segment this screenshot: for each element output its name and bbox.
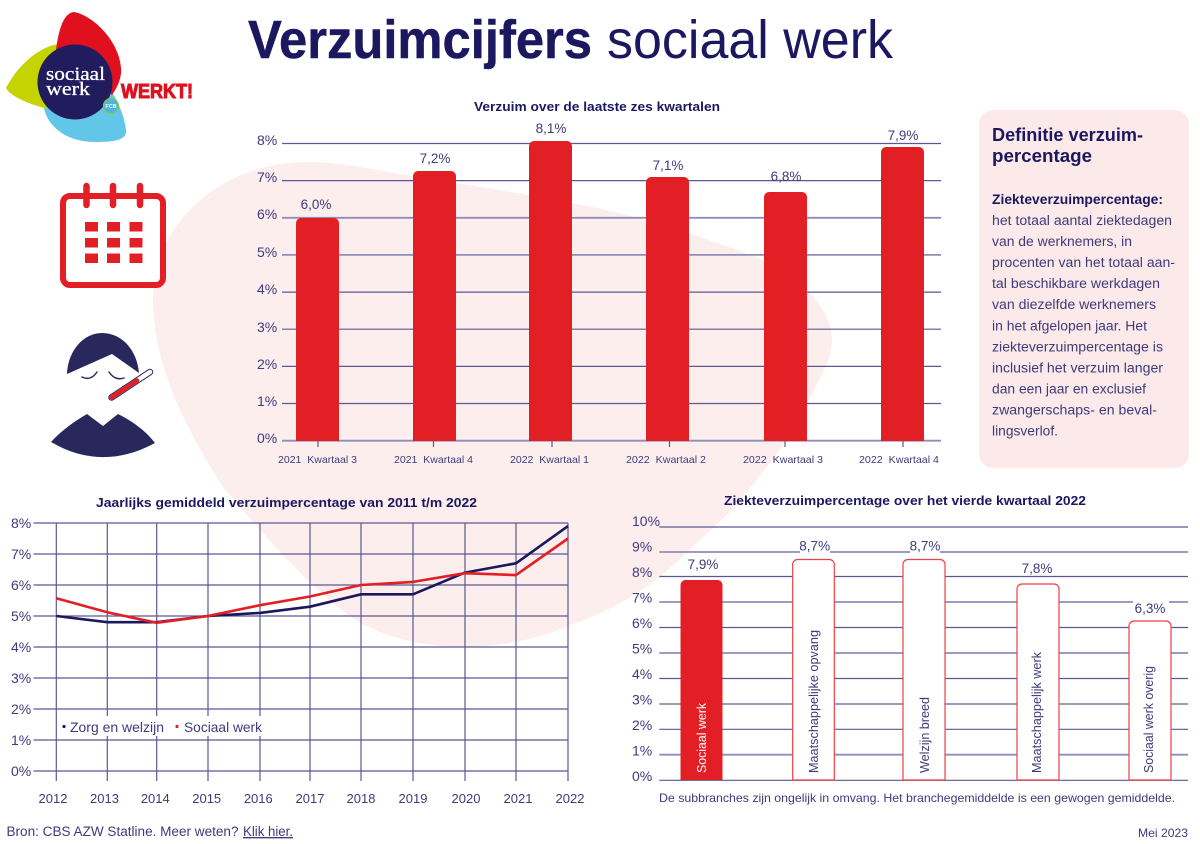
chart: verzuim over de laatste zes kwartalen: 8% xyxy=(257,132,277,148)
panel: definitie verzuimpercentage: procenten van het totaal aan- xyxy=(992,255,1175,270)
chart: verzuim over de laatste zes kwartalen: 2022 Kwartaal 2 xyxy=(626,454,706,466)
panel: definitie verzuimpercentage: Ziekteverzuimpercentage: xyxy=(992,192,1163,207)
chart: ziekteverzuimpercentage vierde kwartaal: 7,8% xyxy=(1022,561,1052,576)
chart: ziekteverzuimpercentage vierde kwartaal: 7% xyxy=(632,590,652,606)
chart: ziekteverzuimpercentage vierde kwartaal: 3% xyxy=(632,692,652,708)
chart: verzuim over de laatste zes kwartalen xyxy=(257,99,941,466)
chart note: De subbranches zijn ongelijk in omvang. Het branchegemiddelde is een gewogen gemiddelde. xyxy=(659,791,1175,805)
chart: jaarlijks gemiddeld verzuimpercentage: 2016 xyxy=(244,791,273,806)
source line: Bron: CBS AZW Statline. Meer weten? xyxy=(6,824,238,839)
panel: definitie verzuimpercentage: van diezelfde werknemers xyxy=(992,297,1156,312)
chart: verzuim over de laatste zes kwartalen: 3% xyxy=(257,319,277,335)
background blob xyxy=(153,162,832,647)
chart: jaarlijks gemiddeld verzuimpercentage: 7% xyxy=(11,546,31,562)
chart: ziekteverzuimpercentage vierde kwartaal: 6% xyxy=(632,615,652,631)
chart: verzuim over de laatste zes kwartalen: 1% xyxy=(257,393,277,409)
chart: verzuim over de laatste zes kwartalen: 2021 Kwartaal 4 xyxy=(394,454,473,466)
chart: verzuim over de laatste zes kwartalen: 2021 Kwartaal 3 xyxy=(278,454,357,466)
legend xyxy=(60,716,265,736)
icon: sick person with thermometer xyxy=(51,333,155,457)
chart: jaarlijks gemiddeld verzuimpercentage: 8% xyxy=(11,515,31,531)
chart: verzuim over de laatste zes kwartalen: 4% xyxy=(257,281,277,297)
chart: jaarlijks gemiddeld verzuimpercentage: 3% xyxy=(11,670,31,686)
chart: ziekteverzuimpercentage vierde kwartaal: 0% xyxy=(632,768,652,784)
chart: ziekteverzuimpercentage vierde kwartaal: Welzijn breed xyxy=(918,697,932,773)
bars: subbranches xyxy=(680,560,1171,780)
chart title: vierde kwartaal: Ziekteverzuimpercentage over het vierde kwartaal 2022 xyxy=(724,493,1086,508)
title xyxy=(248,10,894,70)
chart: verzuim over de laatste zes kwartalen: 2% xyxy=(257,356,277,372)
chart: ziekteverzuimpercentage vierde kwartaal: 9% xyxy=(632,538,652,554)
legend: Sociaal werk xyxy=(184,719,263,735)
date: Mei 2023 xyxy=(1138,826,1188,840)
chart: verzuim over de laatste zes kwartalen: 0% xyxy=(257,430,277,446)
chart: verzuim over de laatste zes kwartalen: 6,8% xyxy=(771,169,801,184)
chart: ziekteverzuimpercentage vierde kwartaal: 8% xyxy=(632,564,652,580)
chart: ziekteverzuimpercentage vierde kwartaal: 10% xyxy=(632,513,660,529)
panel: definitie verzuimpercentage: het totaal aantal ziektedagen xyxy=(992,213,1172,228)
chart: jaarlijks gemiddeld verzuimpercentage: 6% xyxy=(11,577,31,593)
panel: definitie verzuimpercentage: in het afgelopen jaar. Het xyxy=(992,318,1147,334)
bars: kwartalen xyxy=(296,141,924,441)
chart: ziekteverzuimpercentage vierde kwartaal: 6,3% xyxy=(1135,601,1165,616)
title: sociaal werk xyxy=(607,10,894,70)
logo: sociaal werk werkt: sociaal xyxy=(46,65,105,85)
chart: jaarlijks gemiddeld verzuimpercentage: 2015 xyxy=(192,791,221,806)
chart: ziekteverzuimpercentage vierde kwartaal: Maatschappelijk werk xyxy=(1030,651,1044,773)
chart: verzuim over de laatste zes kwartalen: 2022 Kwartaal 3 xyxy=(743,454,823,466)
line: zorg en welzijn xyxy=(56,526,568,622)
chart: jaarlijks gemiddeld verzuimpercentage: 2019 xyxy=(399,791,427,806)
panel: definitie verzuimpercentage: tal beschikbare werkdagen xyxy=(992,276,1160,291)
logo: sociaal werk werkt: WERKT! xyxy=(121,81,193,103)
chart: jaarlijks gemiddeld verzuimpercentage: 2014 xyxy=(141,791,170,806)
logo: sociaal werk werkt: FCB xyxy=(105,104,117,110)
chart: verzuim over de laatste zes kwartalen: 2022 Kwartaal 1 xyxy=(510,454,589,466)
panel: definitie verzuimpercentage: van de werknemers, in xyxy=(992,234,1132,249)
logo: sociaal werk werkt: werk xyxy=(46,80,91,100)
panel: definitie verzuimpercentage: dan een jaar en exclusief xyxy=(992,382,1146,396)
chart: jaarlijks gemiddeld verzuimpercentage: 1% xyxy=(11,732,31,748)
chart: ziekteverzuimpercentage vierde kwartaal xyxy=(632,493,1188,805)
chart title: jaarlijks: Jaarlijks gemiddeld verzuimpercentage van 2011 t/m 2022 xyxy=(96,495,477,510)
panel: definitie verzuimpercentage xyxy=(979,110,1189,468)
chart: verzuim over de laatste zes kwartalen: 8,1% xyxy=(536,121,566,136)
chart: jaarlijks gemiddeld verzuimpercentage: 2020 xyxy=(452,791,480,806)
chart: ziekteverzuimpercentage vierde kwartaal: 5% xyxy=(632,640,652,656)
panel: definitie verzuimpercentage: percentage xyxy=(992,146,1092,166)
chart: jaarlijks gemiddeld verzuimpercentage: 2% xyxy=(11,701,31,717)
panel: definitie verzuimpercentage: lingsverlof. xyxy=(992,424,1058,438)
legend: Zorg en welzijn xyxy=(70,719,164,735)
chart: jaarlijks gemiddeld verzuimpercentage: 2013 xyxy=(90,791,119,806)
source line: Klik hier. xyxy=(243,824,293,839)
chart: ziekteverzuimpercentage vierde kwartaal: 1% xyxy=(632,742,652,758)
chart: jaarlijks gemiddeld verzuimpercentage: 2018 xyxy=(347,791,375,806)
chart: ziekteverzuimpercentage vierde kwartaal: Sociaal werk xyxy=(695,702,709,773)
chart: ziekteverzuimpercentage vierde kwartaal: 8,7% xyxy=(910,539,940,554)
chart: verzuim over de laatste zes kwartalen: 6,0% xyxy=(301,197,331,212)
chart: ziekteverzuimpercentage vierde kwartaal: 2% xyxy=(632,717,652,733)
icon: calendar xyxy=(63,186,163,285)
chart: verzuim over de laatste zes kwartalen: 2022 Kwartaal 4 xyxy=(859,454,939,466)
chart: verzuim over de laatste zes kwartalen: 7,1% xyxy=(653,158,683,173)
chart: verzuim over de laatste zes kwartalen: 5% xyxy=(257,244,277,260)
panel: definitie verzuimpercentage: zwangerschaps- en beval- xyxy=(992,402,1157,418)
chart: ziekteverzuimpercentage vierde kwartaal: Maatschappelijke opvang xyxy=(807,630,821,773)
panel: definitie verzuimpercentage: Definitie verzuim- xyxy=(992,125,1143,145)
line: sociaal werk xyxy=(56,538,568,623)
chart: jaarlijks gemiddeld verzuimpercentage: 4% xyxy=(11,639,31,655)
chart: ziekteverzuimpercentage vierde kwartaal: 4% xyxy=(632,666,652,682)
chart: ziekteverzuimpercentage vierde kwartaal: Sociaal werk overig xyxy=(1142,666,1156,773)
chart title: kwartalen: Verzuim over de laatste zes kwartalen xyxy=(474,99,720,114)
chart: jaarlijks gemiddeld verzuimpercentage: 2017 xyxy=(296,791,324,806)
chart: verzuim over de laatste zes kwartalen: 7,9% xyxy=(888,128,918,143)
panel: definitie verzuimpercentage: ziekteverzuimpercentage is xyxy=(992,340,1163,354)
chart: jaarlijks gemiddeld verzuimpercentage: 2012 xyxy=(39,791,67,806)
chart: ziekteverzuimpercentage vierde kwartaal: 8,7% xyxy=(799,539,830,554)
chart: verzuim over de laatste zes kwartalen: 6% xyxy=(257,206,277,222)
chart: jaarlijks gemiddeld verzuimpercentage xyxy=(11,495,584,806)
panel: definitie verzuimpercentage: inclusief het verzuim langer xyxy=(992,360,1164,376)
chart: ziekteverzuimpercentage vierde kwartaal: 7,9% xyxy=(688,557,718,572)
chart: jaarlijks gemiddeld verzuimpercentage: 5% xyxy=(11,608,31,624)
chart: jaarlijks gemiddeld verzuimpercentage: 2021 xyxy=(504,791,532,806)
chart: jaarlijks gemiddeld verzuimpercentage: 2022 xyxy=(556,791,584,806)
chart: verzuim over de laatste zes kwartalen: 7,2% xyxy=(420,151,450,166)
chart: verzuim over de laatste zes kwartalen: 7% xyxy=(257,169,277,185)
title: Verzuimcijfers xyxy=(248,10,592,70)
chart: jaarlijks gemiddeld verzuimpercentage: 0% xyxy=(11,763,31,779)
logo: sociaal werk werkt xyxy=(6,12,193,142)
